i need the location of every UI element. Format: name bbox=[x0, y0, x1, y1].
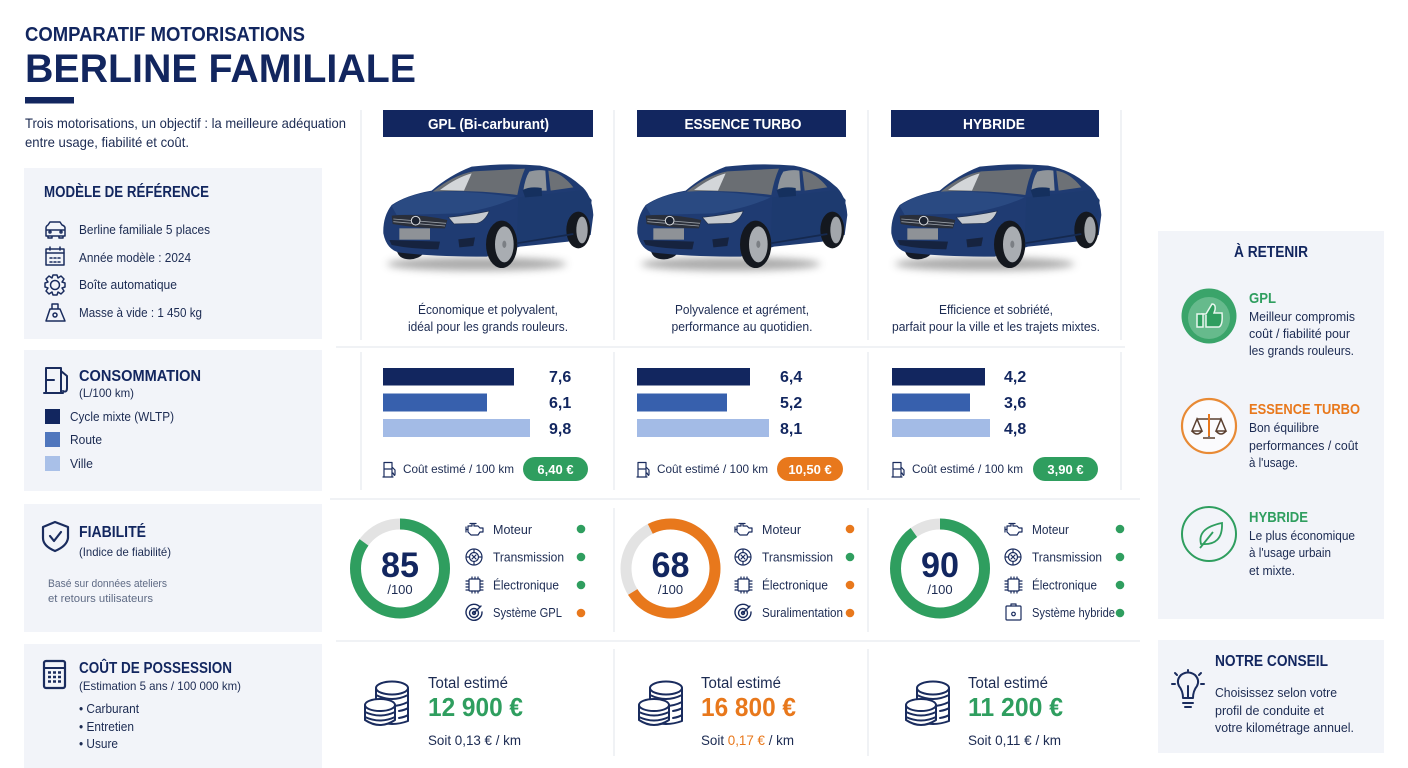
car image: hybride bbox=[891, 164, 1101, 271]
reliability list: GPL: Transmission bbox=[493, 550, 564, 564]
icon: weight bbox=[46, 304, 65, 321]
reliability list: essence turbo: Moteur bbox=[762, 523, 801, 537]
gauge: GPL 85/100 bbox=[356, 524, 444, 613]
bar chart: essence turbo: 8,1 bbox=[780, 421, 802, 438]
column: GPL header and car: GPL (Bi-carburant) bbox=[428, 116, 549, 133]
icon: light bulb bbox=[1172, 670, 1204, 707]
column: hybride header and car: Efficience et sobriété, bbox=[939, 303, 1053, 317]
panel: notre conseil: NOTRE CONSEIL bbox=[1215, 653, 1328, 670]
reliability list: hybride: Système hybride bbox=[1032, 606, 1115, 620]
total cost: essence turbo: Total estimé bbox=[701, 675, 781, 692]
reliability list: essence turbo: Électronique bbox=[762, 578, 828, 592]
panel: modèle de référence: Boîte automatique bbox=[79, 278, 177, 292]
takeaway: GPL bbox=[1249, 290, 1355, 358]
column: hybride header and car bbox=[891, 110, 1101, 334]
takeaway: essence turbo: à l'usage. bbox=[1249, 455, 1298, 470]
reliability list: GPL: Moteur bbox=[493, 523, 532, 537]
bar chart: essence turbo: 5,2 bbox=[780, 395, 802, 412]
panel: notre conseil bbox=[1158, 640, 1384, 753]
title block: COMPARATIF MOTORISATIONS bbox=[25, 24, 305, 46]
column: GPL header and car bbox=[383, 110, 593, 334]
column: hybride header and car: HYBRIDE bbox=[963, 116, 1025, 133]
reliability list: hybride: Moteur bbox=[1032, 523, 1069, 537]
panel: consommation: CONSOMMATION bbox=[79, 368, 201, 385]
bar chart: essence turbo: 6,4 bbox=[780, 369, 802, 386]
panel: coût de possession: (Estimation 5 ans / 100 000 km) bbox=[79, 679, 241, 693]
cost per 100 km: essence turbo: 10,50 € bbox=[788, 462, 832, 477]
panel: notre conseil: Choisissez selon votre bbox=[1215, 685, 1337, 700]
intro text: Trois motorisations, un objectif : la meilleure adéquation bbox=[25, 115, 346, 131]
total cost: hybride: Soit 0,11 € / km bbox=[968, 732, 1061, 748]
takeaway: essence turbo bbox=[1249, 401, 1360, 470]
bar chart: hybride: 3,6 bbox=[1004, 395, 1026, 412]
takeaway: essence turbo: ESSENCE TURBO bbox=[1249, 401, 1360, 418]
cost per 100 km: hybride: 3,90 € bbox=[1047, 462, 1084, 477]
legend: route: Route bbox=[70, 433, 102, 447]
panel: notre conseil: votre kilométrage annuel. bbox=[1215, 720, 1354, 735]
gauge: GPL 85/100: 85 bbox=[381, 546, 419, 585]
reliability list: essence turbo: Suralimentation bbox=[762, 606, 843, 620]
total cost: GPL bbox=[365, 675, 523, 748]
gauge: hybride 90/100: 90 bbox=[921, 546, 959, 585]
car image: GPL bbox=[383, 164, 593, 271]
car image: essence turbo bbox=[637, 164, 847, 271]
panel: coût de possession: • Carburant bbox=[79, 702, 139, 716]
icon: leaf bbox=[1182, 507, 1236, 561]
gauge: essence turbo 68/100: /100 bbox=[658, 582, 683, 597]
gauge: GPL 85/100: /100 bbox=[387, 582, 413, 597]
icon: car bbox=[46, 222, 65, 238]
icon: thumbs up bbox=[1182, 288, 1236, 344]
total cost: hybride bbox=[906, 675, 1063, 748]
takeaway: hybride: HYBRIDE bbox=[1249, 509, 1308, 526]
panel: modèle de référence: Année modèle : 2024 bbox=[79, 251, 191, 265]
reliability list: hybride: Électronique bbox=[1032, 578, 1097, 592]
icon: calculator bbox=[44, 661, 65, 688]
column: essence turbo header and car: ESSENCE TURBO bbox=[684, 116, 802, 133]
bar chart: GPL: 6,1 bbox=[549, 395, 571, 412]
cost per 100 km: essence turbo bbox=[637, 457, 843, 481]
column: essence turbo header and car bbox=[637, 110, 847, 334]
total cost: hybride: 11 200 € bbox=[968, 692, 1063, 722]
bar chart: GPL: 9,8 bbox=[549, 421, 571, 438]
icon: calendar bbox=[46, 247, 64, 265]
cost per 100 km: hybride bbox=[892, 457, 1098, 481]
panel: modèle de référence: Berline familiale 5 places bbox=[79, 223, 210, 237]
bar chart: GPL bbox=[383, 368, 588, 481]
panel: coût de possession: • Usure bbox=[79, 737, 118, 751]
takeaway: GPL: Meilleur compromis bbox=[1249, 309, 1355, 324]
reliability list: GPL: Électronique bbox=[493, 578, 559, 592]
total cost: essence turbo: 16 800 € bbox=[701, 692, 796, 722]
panel: modèle de référence: MODÈLE DE RÉFÉRENCE bbox=[44, 184, 209, 201]
bar chart: essence turbo bbox=[637, 368, 843, 481]
panel: coût de possession bbox=[24, 644, 322, 768]
gauge: essence turbo 68/100 bbox=[611, 509, 730, 628]
panel: modèle de référence: Masse à vide : 1 450 kg bbox=[79, 306, 202, 320]
takeaway: essence turbo: performances / coût bbox=[1249, 438, 1358, 453]
panel: fiabilité: et retours utilisateurs bbox=[48, 593, 154, 605]
panel: fiabilité bbox=[24, 504, 322, 632]
panel: modèle de référence bbox=[24, 168, 322, 339]
panel: notre conseil: profil de conduite et bbox=[1215, 703, 1324, 718]
reliability list: GPL: Système GPL bbox=[493, 606, 562, 620]
takeaway: hybride: à l'usage urbain bbox=[1249, 545, 1331, 560]
title block: BERLINE FAMILIALE bbox=[25, 47, 416, 91]
total cost: essence turbo bbox=[639, 675, 796, 748]
takeaway: GPL: GPL bbox=[1249, 290, 1276, 307]
total cost: GPL: 12 900 € bbox=[428, 692, 523, 722]
panel: coût de possession: COÛT DE POSSESSION bbox=[79, 659, 232, 677]
reliability list: hybride: Transmission bbox=[1032, 550, 1102, 564]
gauge: essence turbo 68/100: 68 bbox=[652, 546, 690, 585]
reliability list: GPL bbox=[466, 523, 585, 620]
cost per 100 km: hybride: Coût estimé / 100 km bbox=[912, 462, 1023, 476]
icon: shield bbox=[43, 522, 68, 551]
bar chart: hybride: 4,8 bbox=[1004, 421, 1026, 438]
panel: fiabilité: (Indice de fiabilité) bbox=[79, 545, 171, 559]
intro text bbox=[25, 115, 346, 150]
cost per 100 km: essence turbo: Coût estimé / 100 km bbox=[657, 462, 768, 476]
reliability list: essence turbo: Transmission bbox=[762, 550, 833, 564]
column: GPL header and car: idéal pour les grands rouleurs. bbox=[408, 320, 568, 334]
bar chart: hybride bbox=[892, 368, 1098, 481]
legend: cycle mixte: Cycle mixte (WLTP) bbox=[70, 410, 174, 424]
total cost: GPL: Total estimé bbox=[428, 675, 508, 692]
takeaway: hybride: Le plus économique bbox=[1249, 528, 1355, 543]
reliability list: hybride bbox=[1005, 523, 1124, 620]
reliability list: essence turbo bbox=[735, 523, 854, 620]
takeaway: GPL: coût / fiabilité pour bbox=[1249, 326, 1351, 341]
gauge: hybride 90/100: /100 bbox=[927, 582, 953, 597]
panel: fiabilité: Basé sur données ateliers bbox=[48, 578, 167, 590]
column: essence turbo header and car: Polyvalence et agrément, bbox=[675, 303, 809, 317]
title block bbox=[25, 24, 416, 104]
icon: scales bbox=[1182, 399, 1236, 453]
icon: fuel pump bbox=[44, 368, 67, 393]
intro text: entre usage, fiabilité et coût. bbox=[25, 134, 189, 150]
total cost: GPL: Soit 0,13 € / km bbox=[428, 732, 521, 748]
legend: route bbox=[45, 432, 102, 447]
total cost: essence turbo: Soit 0,17 € / km bbox=[701, 732, 794, 748]
bar chart: GPL: 7,6 bbox=[549, 369, 571, 386]
takeaway: hybride: et mixte. bbox=[1249, 563, 1295, 578]
takeaway: GPL: les grands rouleurs. bbox=[1249, 343, 1354, 358]
takeaway: hybride bbox=[1249, 509, 1355, 578]
column: essence turbo header and car: performance au quotidien. bbox=[672, 320, 812, 334]
cost per 100 km: GPL: 6,40 € bbox=[537, 462, 574, 477]
panel: consommation: (L/100 km) bbox=[79, 386, 134, 400]
gauge: hybride 90/100 bbox=[896, 524, 984, 613]
takeaway: essence turbo: Bon équilibre bbox=[1249, 420, 1319, 435]
column: hybride header and car: parfait pour la ville et les trajets mixtes. bbox=[892, 320, 1100, 334]
panel: à retenir bbox=[1158, 231, 1384, 619]
legend: ville: Ville bbox=[70, 457, 93, 471]
legend: ville bbox=[45, 456, 93, 471]
panel: consommation bbox=[24, 350, 322, 491]
total cost: hybride: Total estimé bbox=[968, 675, 1048, 692]
icon: gear bbox=[45, 275, 65, 295]
column: GPL header and car: Économique et polyvalent, bbox=[418, 302, 558, 317]
panel: fiabilité: FIABILITÉ bbox=[79, 524, 146, 541]
cost per 100 km: GPL: Coût estimé / 100 km bbox=[403, 462, 514, 476]
panel: à retenir: À RETENIR bbox=[1234, 242, 1308, 261]
cost per 100 km: GPL bbox=[383, 457, 588, 481]
panel: coût de possession: • Entretien bbox=[79, 720, 134, 734]
bar chart: hybride: 4,2 bbox=[1004, 369, 1026, 386]
